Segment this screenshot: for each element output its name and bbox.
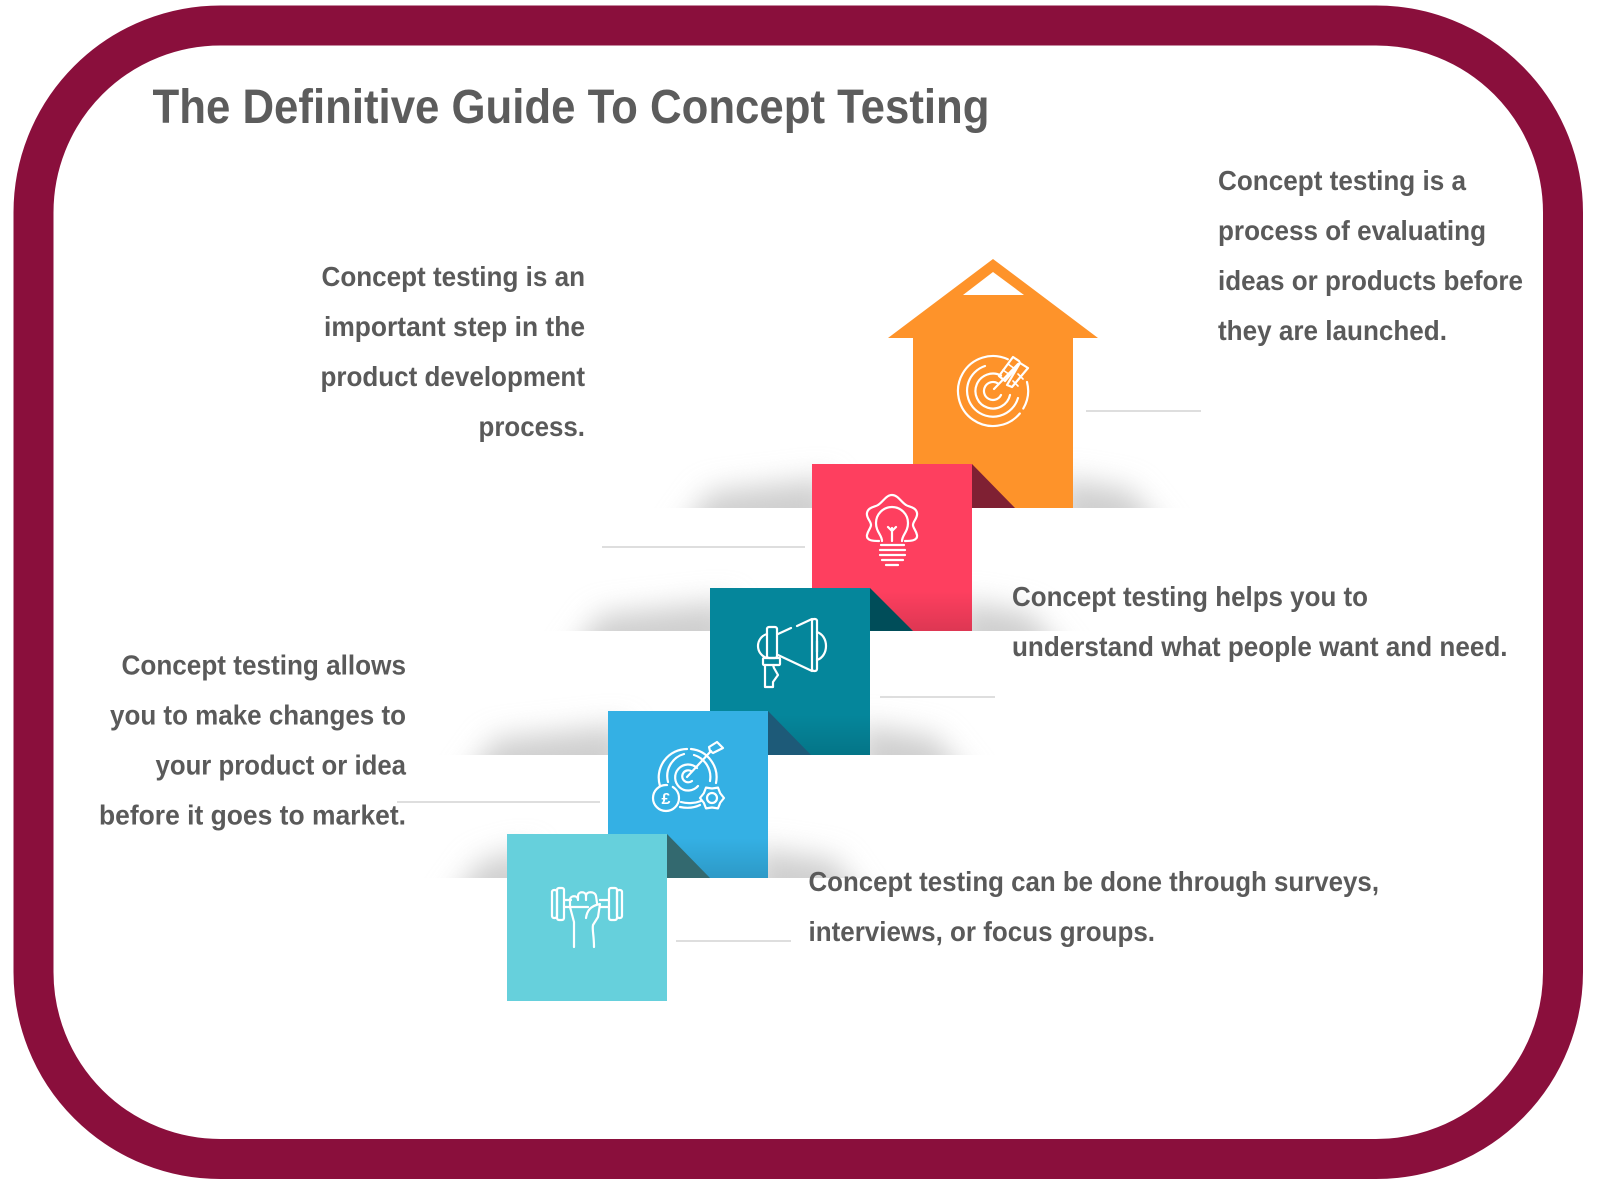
text block: make changes: you to make changes to xyxy=(110,700,406,730)
fold: red step xyxy=(972,464,1015,508)
connector: cyan step xyxy=(676,940,791,942)
fold: cyan step xyxy=(667,834,710,878)
text block: wants and needs: understand what people want and need. xyxy=(1012,631,1508,662)
text block: make changes xyxy=(99,650,406,830)
text block: wants and needs: Concept testing helps you to xyxy=(1012,581,1368,612)
step 3: teal square xyxy=(710,588,913,755)
text block: methods xyxy=(808,866,1379,947)
connector: red step xyxy=(602,546,805,548)
text block: make changes: Concept testing allows xyxy=(122,650,406,680)
fold: teal step xyxy=(870,588,913,631)
icon: fist with dumbbell xyxy=(552,888,622,947)
text block: evaluating ideas: they are launched. xyxy=(1218,315,1447,346)
step 5: orange arrow house xyxy=(888,259,1098,508)
step 1: cyan square xyxy=(507,834,710,1001)
text block: important step: product development xyxy=(320,361,585,392)
text block: wants and needs xyxy=(1012,581,1508,662)
step 2: blue square xyxy=(608,711,811,878)
text block: important step: Concept testing is an xyxy=(322,261,585,292)
icon: target, coin and gear xyxy=(653,742,724,811)
text block: important step: important step in the xyxy=(324,311,585,342)
text block: important step: process. xyxy=(478,411,585,442)
text block: make changes: your product or idea xyxy=(156,750,406,780)
icon: pound sign: £ xyxy=(662,791,671,808)
text block: evaluating ideas xyxy=(1218,165,1523,346)
stair shadows xyxy=(445,478,1170,910)
icon: target with arrow xyxy=(958,356,1028,426)
connector: teal step xyxy=(880,696,995,698)
text block: evaluating ideas: process of evaluating xyxy=(1218,215,1486,246)
fold: blue step xyxy=(768,711,811,755)
step 4: red square xyxy=(812,464,1015,631)
connector: orange step xyxy=(1086,410,1201,412)
title: The Definitive Guide To Concept Testing xyxy=(152,81,990,134)
icon: megaphone xyxy=(758,619,826,687)
text block: methods: interviews, or focus groups. xyxy=(808,916,1155,947)
text block: methods: Concept testing can be done through surveys, xyxy=(808,866,1379,897)
text block: make changes: before it goes to market. xyxy=(99,800,406,830)
text block: important step xyxy=(320,261,585,442)
text block: evaluating ideas: ideas or products before xyxy=(1218,265,1523,296)
text block: evaluating ideas: Concept testing is a xyxy=(1218,165,1466,196)
icon: lightbulb in gear xyxy=(867,495,917,565)
connector: blue step xyxy=(397,801,600,803)
